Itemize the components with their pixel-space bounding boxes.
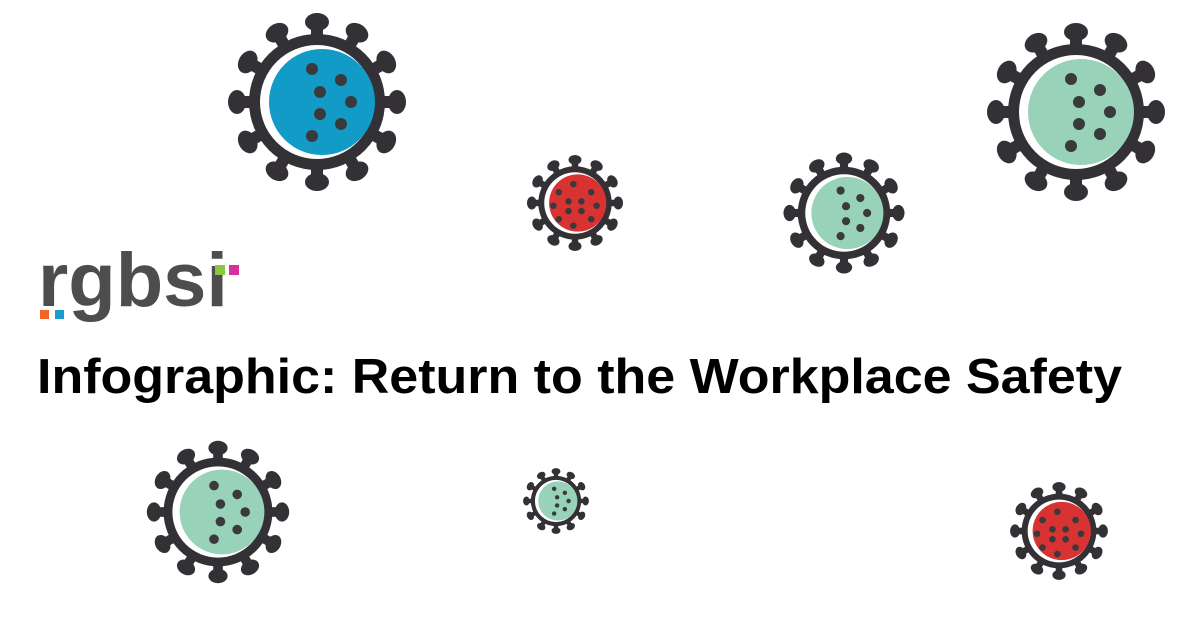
virus: red small	[527, 155, 623, 251]
logo: rgbsi: rgbsi	[38, 239, 228, 323]
virus: teal bottom left	[147, 441, 289, 583]
virus: teal tiny	[523, 468, 589, 534]
virus: teal medium	[783, 152, 905, 274]
virus: blue large	[228, 13, 406, 191]
virus: red bottom right	[1010, 482, 1108, 580]
virus: teal large top right	[987, 23, 1165, 201]
title: Infographic: Return to the Workplace Safety	[37, 350, 1122, 404]
